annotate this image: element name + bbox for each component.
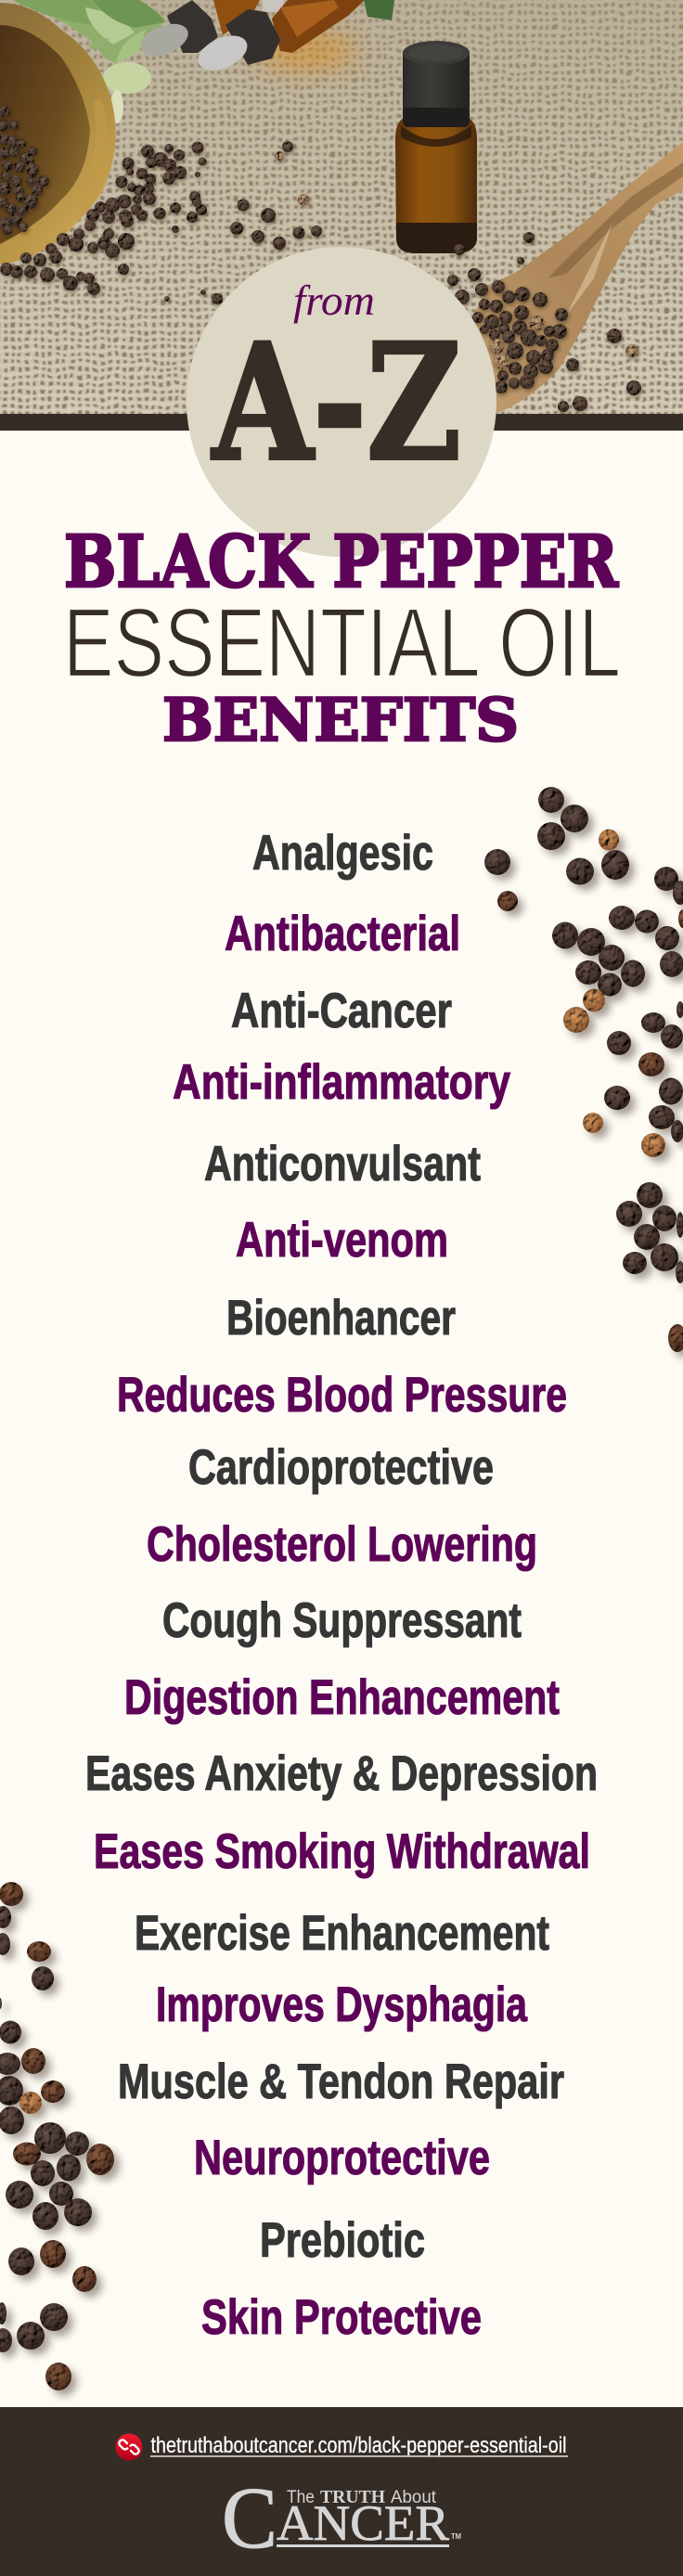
benefit: Bioenhancer: Bioenhancer — [226, 1291, 456, 1346]
logo: the truth about cancer — [222, 2470, 461, 2567]
benefit: Anti-inflammatory: Anti-inflammatory — [173, 1055, 510, 1110]
source url: thetruthaboutcancer.com/black-pepper-essential-oil — [150, 2433, 566, 2458]
dropper bottle, front — [193, 0, 365, 77]
benefit: Antibacterial: Antibacterial — [225, 907, 460, 961]
benefit: Cholesterol Lowering: Cholesterol Lowering — [147, 1517, 537, 1572]
title: benefits: BENEFITS — [162, 686, 519, 755]
dropper bottle, back — [135, 0, 283, 62]
leaves — [13, 0, 394, 123]
scattered peppercorns — [0, 141, 641, 412]
A-Z heading: A-Z — [211, 308, 461, 496]
logo: the truth about cancer: TRUTH — [320, 2487, 385, 2507]
benefit: Muscle & Tendon Repair: Muscle & Tendon Repair — [118, 2054, 564, 2109]
icon: link — [115, 2433, 143, 2461]
logo: the truth about cancer: C — [222, 2470, 277, 2567]
main essential oil bottle — [395, 41, 477, 253]
mortar — [0, 3, 116, 264]
from label: from — [293, 277, 375, 324]
benefit: Improves Dysphagia: Improves Dysphagia — [156, 1977, 527, 2032]
logo: the truth about cancer: ANCER — [277, 2495, 449, 2551]
benefit: Cough Suppressant: Cough Suppressant — [162, 1593, 522, 1648]
benefit: Analgesic: Analgesic — [252, 826, 433, 881]
benefit: Reduces Blood Pressure: Reduces Blood Pressure — [117, 1368, 567, 1423]
benefit: Neuroprotective: Neuroprotective — [194, 2131, 490, 2185]
header photo: burlap, mortar, bottles, spoon and peppercorns — [0, 0, 683, 423]
benefit: Anti-Cancer: Anti-Cancer — [231, 984, 452, 1038]
benefit: Skin Protective: Skin Protective — [201, 2290, 482, 2345]
title circle badge — [187, 247, 496, 557]
logo: the truth about cancer: The — [287, 2488, 315, 2507]
benefit: Exercise Enhancement: Exercise Enhancement — [135, 1906, 549, 1961]
burlap cloth — [0, 0, 683, 423]
logo: the truth about cancer: About — [391, 2488, 437, 2507]
benefit: Digestion Enhancement: Digestion Enhancement — [124, 1670, 560, 1725]
peppercorns in mortar — [0, 106, 49, 235]
benefits list — [85, 826, 598, 2345]
benefit: Prebiotic: Prebiotic — [260, 2213, 425, 2268]
benefit: Anti-venom: Anti-venom — [236, 1213, 448, 1268]
wooden spoon — [464, 142, 683, 413]
footer — [0, 2407, 683, 2576]
pale peppercorns — [275, 151, 638, 369]
peppercorns, right side — [484, 787, 683, 1352]
benefit: Anticonvulsant: Anticonvulsant — [204, 1137, 481, 1191]
dark band under photo — [0, 414, 683, 431]
peppercorns, left side — [0, 1882, 114, 2390]
benefit: Cardioprotective: Cardioprotective — [188, 1440, 494, 1495]
logo: the truth about cancer: TM — [451, 2532, 461, 2541]
